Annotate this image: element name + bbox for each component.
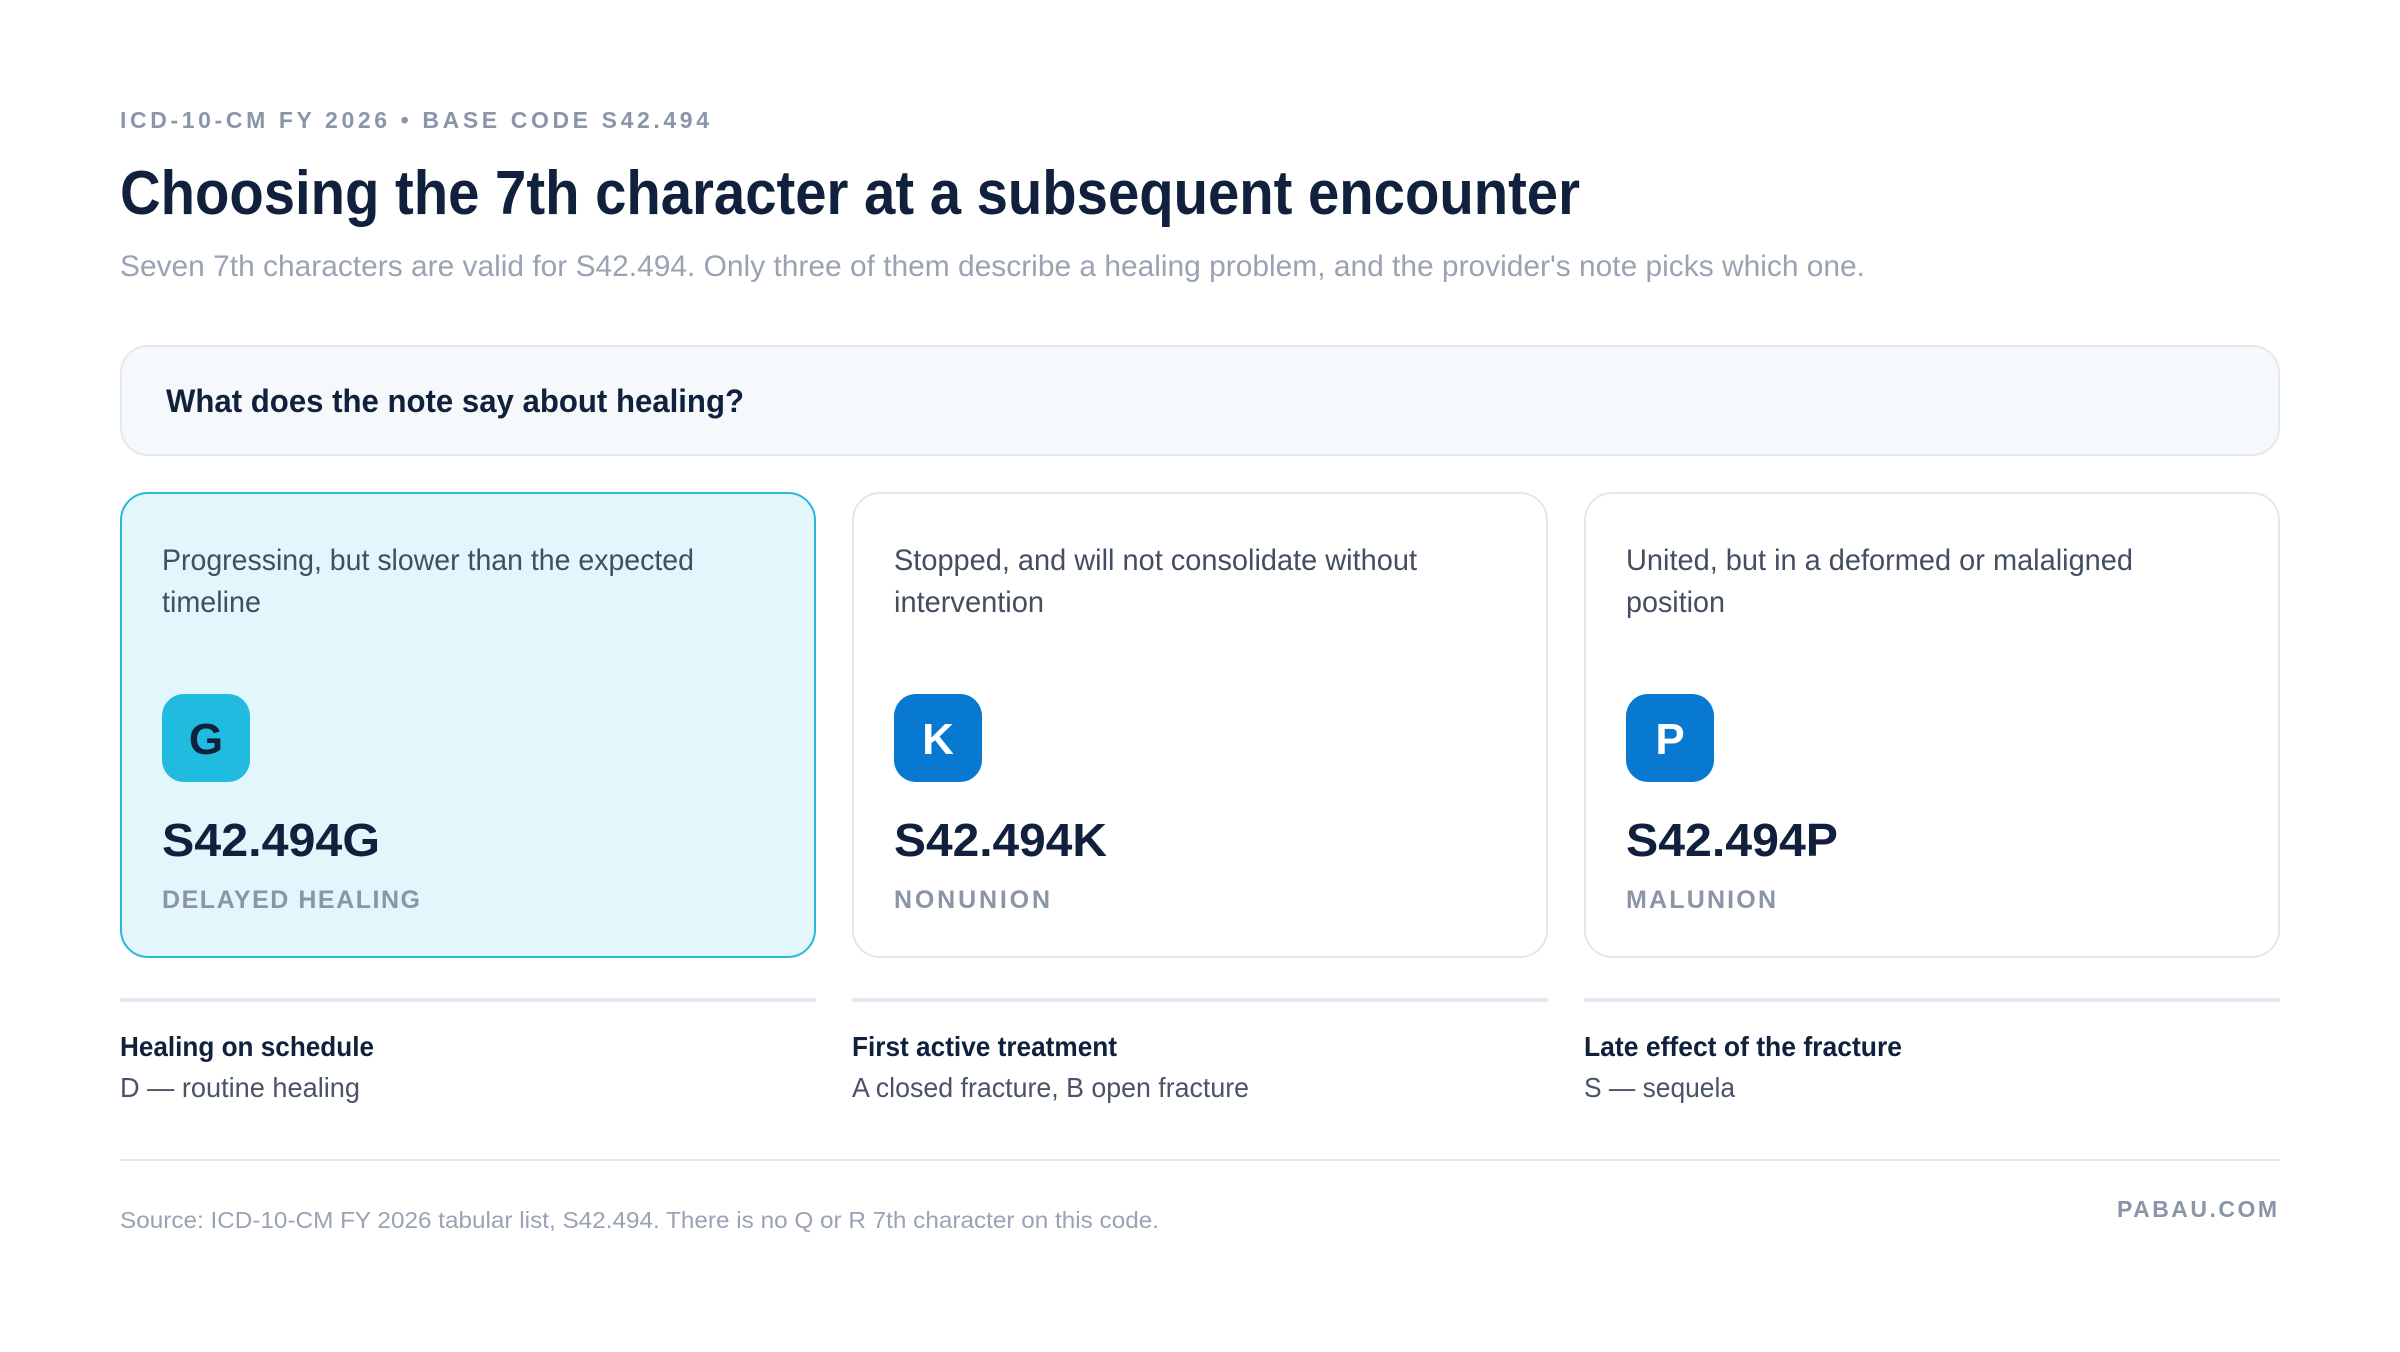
- note: healing on schedule: Healing on schedule: [120, 1031, 374, 1062]
- note: late effect of the fracture: Late effect of the fracture: [1584, 1031, 1902, 1062]
- card P label: MALUNION: [1626, 886, 1776, 914]
- header block: [120, 107, 1865, 283]
- icon: P badge: P: [1655, 715, 1685, 764]
- icon: P badge: [1626, 694, 1714, 782]
- card K label: NONUNION: [894, 886, 1050, 914]
- card P description: United, but in a deformed or malaligned: [1626, 544, 2133, 577]
- card G description: [162, 544, 694, 619]
- card P description: position: [1626, 586, 1725, 619]
- icon: K badge: K: [922, 715, 954, 764]
- brand: PABAU.COM: [2117, 1196, 2277, 1222]
- note: first active treatment: A closed fracture, B open fracture: [852, 1072, 1249, 1103]
- note: first active treatment: First active treatment: [852, 1031, 1117, 1062]
- panel: card K nonunion: [853, 493, 1547, 957]
- eyebrow: ICD-10-CM FY 2026 • BASE CODE S42.494: [120, 107, 709, 133]
- icon: K badge: [894, 694, 982, 782]
- panel: card G delayed healing: [121, 493, 815, 957]
- card G code: S42.494G: [162, 814, 380, 866]
- note: healing on schedule: D — routine healing: [120, 1072, 360, 1103]
- note: late effect of the fracture: S — sequela: [1584, 1072, 1735, 1103]
- panel: card P malunion: [1585, 493, 2279, 957]
- icon: G badge: [162, 694, 250, 782]
- note: healing on schedule: [120, 998, 816, 1103]
- title: Choosing the 7th character at a subsequent encounter: [120, 159, 1580, 228]
- card K description: Stopped, and will not consolidate without: [894, 544, 1418, 577]
- card G description: timeline: [162, 586, 261, 619]
- card K description: intervention: [894, 586, 1044, 619]
- source note: Source: ICD-10-CM FY 2026 tabular list, S42.494. There is no Q or R 7th character on this code.: [120, 1207, 1159, 1233]
- icon: G badge: G: [189, 715, 223, 764]
- question text: What does the note say about healing?: [166, 383, 744, 419]
- card G label: DELAYED HEALING: [162, 886, 420, 914]
- card G description: Progressing, but slower than the expected: [162, 544, 694, 577]
- card K code: S42.494K: [894, 814, 1107, 866]
- footer: [120, 1159, 2280, 1233]
- panel: question bar: [121, 346, 2279, 455]
- card P code: S42.494P: [1626, 814, 1838, 866]
- card K description: [894, 544, 1418, 619]
- card P description: [1626, 544, 2133, 619]
- note: late effect of the fracture: [1584, 998, 2280, 1103]
- subtitle: Seven 7th characters are valid for S42.494. Only three of them describe a healing problem, and the provider's note picks which one.: [120, 250, 1865, 283]
- note: first active treatment: [852, 998, 1548, 1103]
